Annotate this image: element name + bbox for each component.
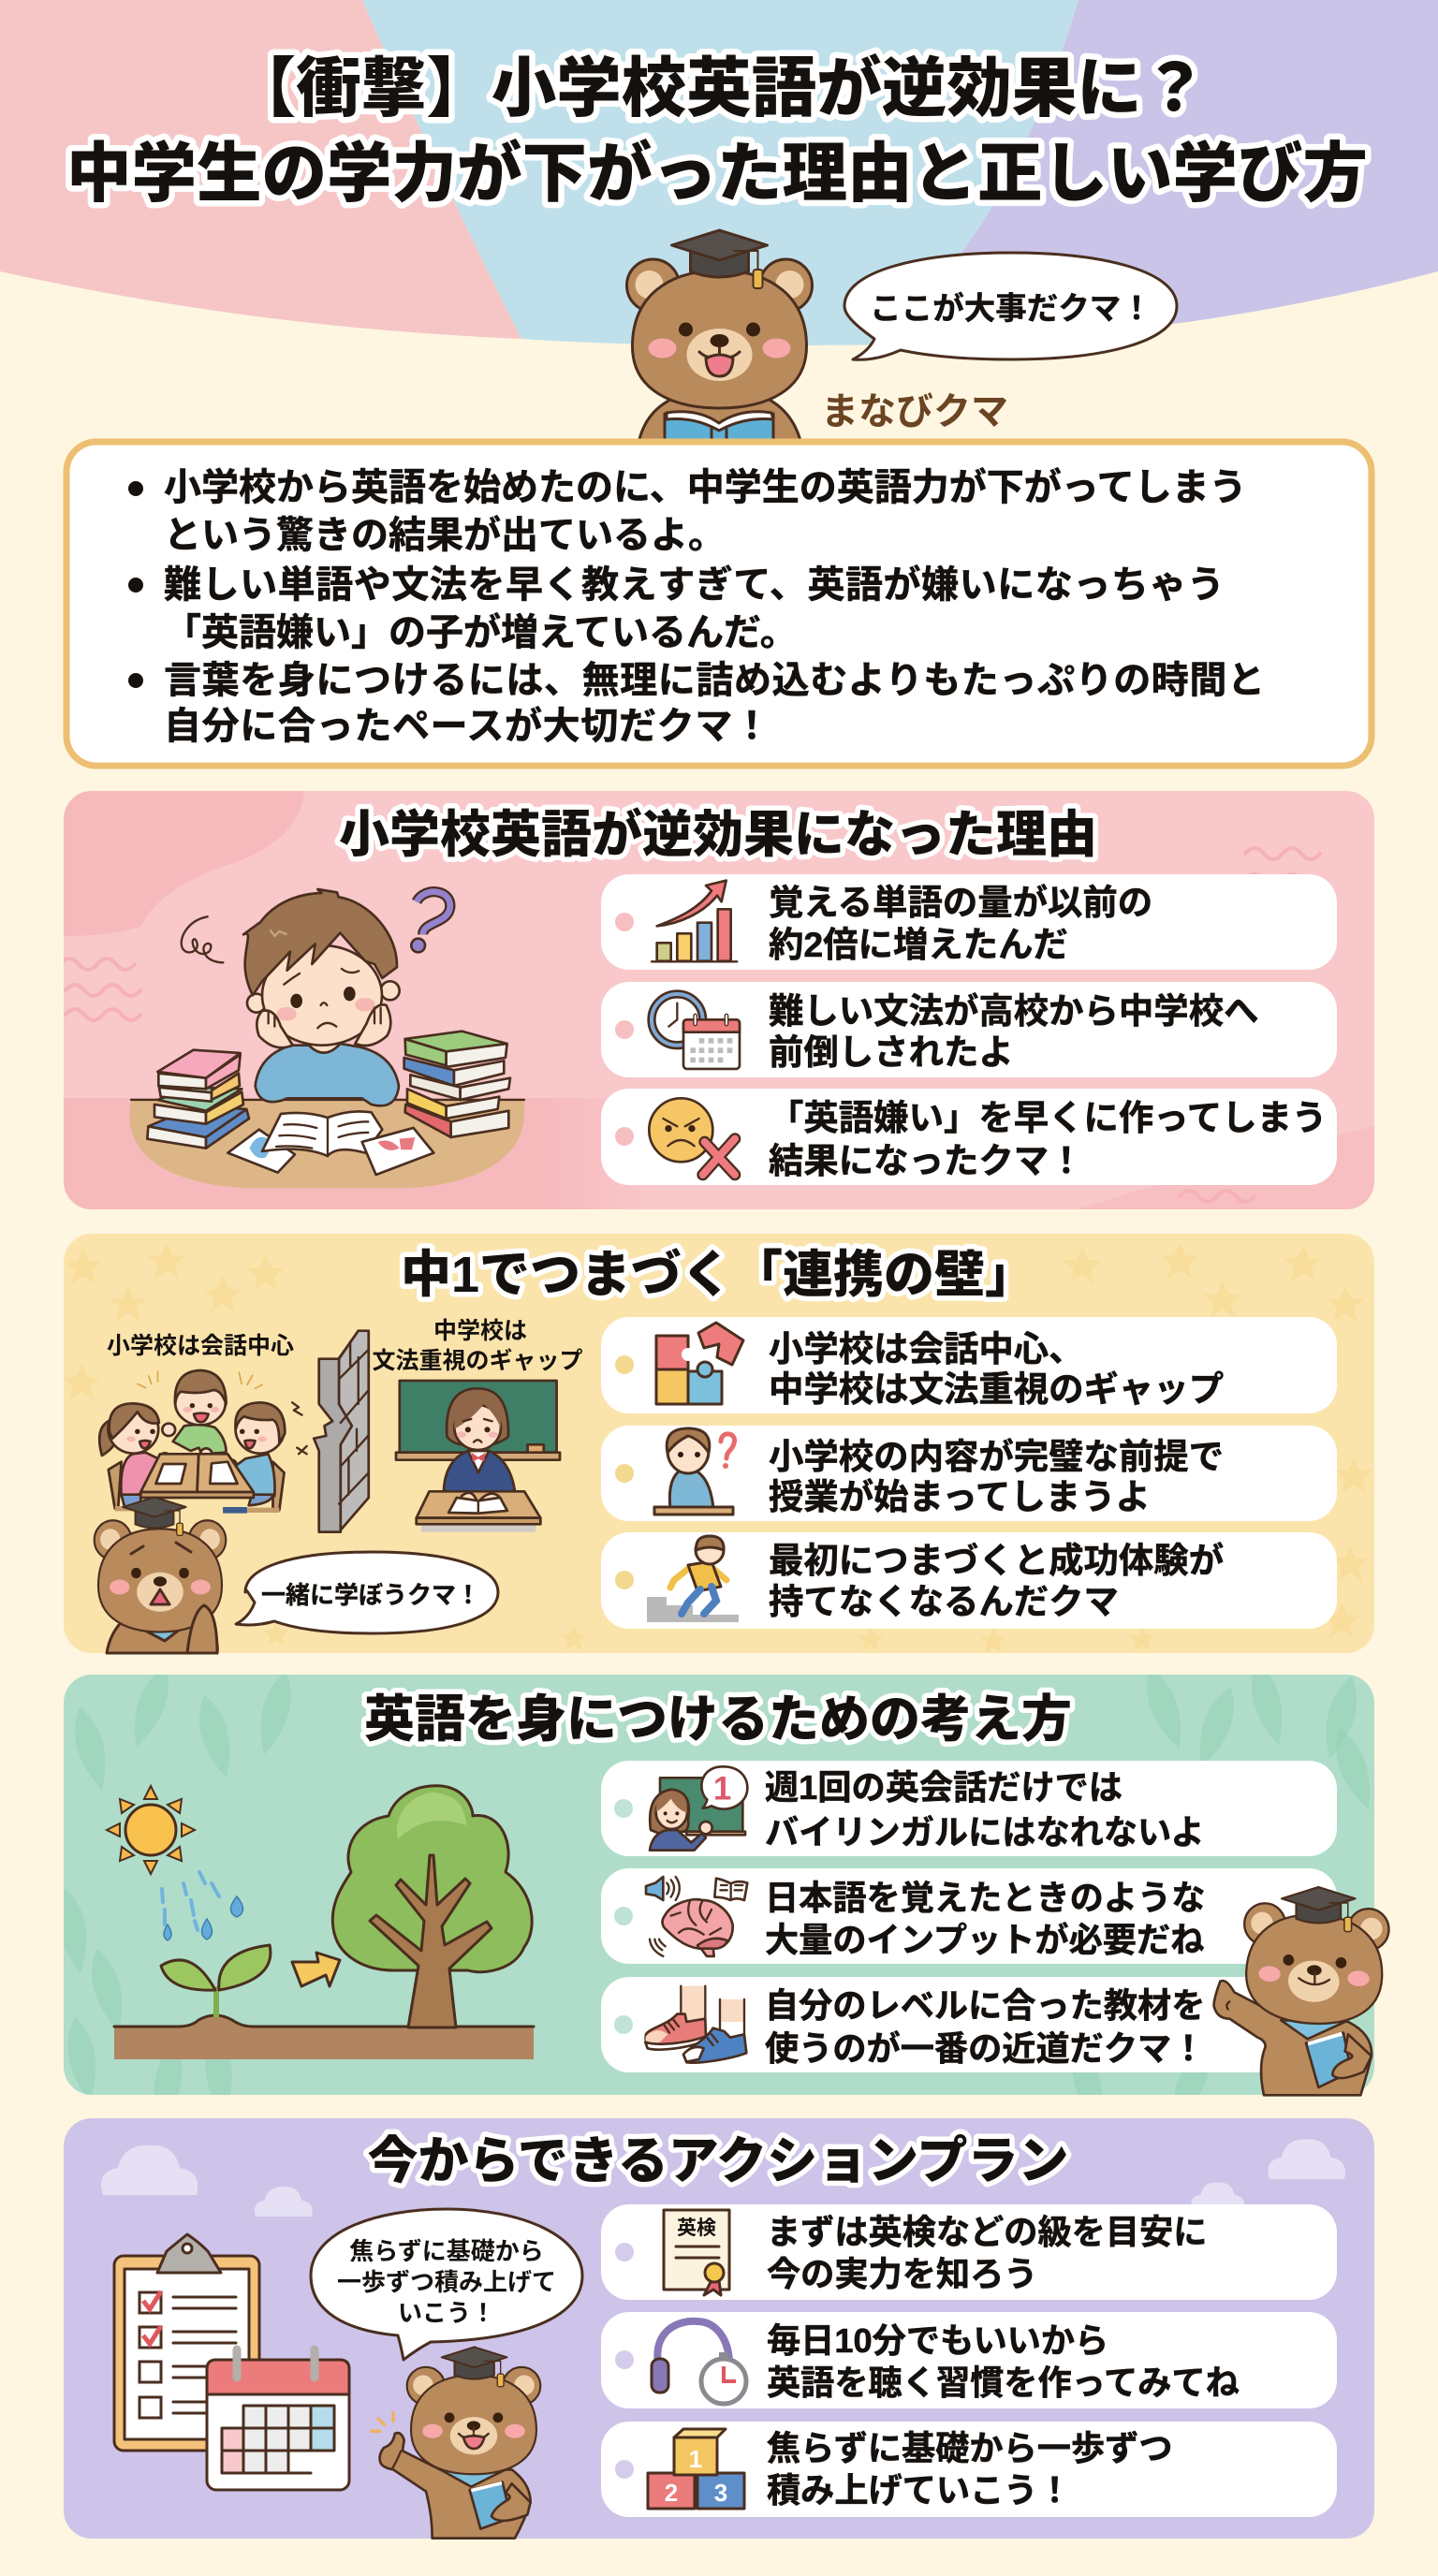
summary panel: 難しい単語や文法を早く教えすぎて、英語が嫌いになっちゃう xyxy=(164,564,1225,606)
icon: numbered blocks: 2 xyxy=(665,2479,678,2507)
icon: thinking boy xyxy=(654,1428,735,1515)
item row: Eiken: 今の実力を知ろう xyxy=(767,2255,1037,2293)
item row: stumbling xyxy=(601,1532,1337,1629)
item row: grammar moved earlier xyxy=(601,982,1337,1077)
heading: 中1でつまづく「連携の壁」 xyxy=(401,1247,1035,1303)
item row: grammar moved earlier: 難しい文法が高校から中学校へ xyxy=(769,991,1258,1031)
item row: huge input: 大量のインプットが必要だね xyxy=(765,1921,1204,1959)
illustration: sun and rain xyxy=(107,1786,243,1940)
item row: assumed knowledge: 授業が始まってしまうよ xyxy=(769,1477,1151,1516)
title: 中学生の学力が下がった理由と正しい学び方 xyxy=(66,137,1368,210)
item row: daily listening xyxy=(601,2312,1337,2408)
summary panel xyxy=(66,442,1372,766)
heading: 今からできるアクションプラン xyxy=(368,2133,1068,2189)
item row: right-level materials: 自分のレベルに合った教材を xyxy=(765,1986,1205,2025)
illustration: wall xyxy=(314,1331,369,1532)
label: elementary: 小学校は会話中心 xyxy=(107,1333,294,1359)
right stack xyxy=(405,1105,451,1137)
item row: assumed knowledge xyxy=(601,1426,1337,1521)
item row: conversation vs grammar: 小学校は会話中心、 xyxy=(769,1329,1084,1368)
speech bubble: ここが大事だクマ！: ここが大事だクマ！ xyxy=(870,291,1152,327)
item row: once a week: バイリンガルにはなれないよ xyxy=(765,1813,1205,1852)
item row: once a week: 週1回の英会話だけでは xyxy=(765,1768,1123,1807)
summary panel: 小学校から英語を始めたのに、中学生の英語力が下がってしまう xyxy=(164,467,1247,508)
summary panel: という驚きの結果が出ているよ。 xyxy=(164,515,726,556)
icon: angry face with cross xyxy=(649,1098,735,1175)
item row: vocabulary doubled: 覚える単語の量が以前の xyxy=(769,883,1152,922)
icon: Eiken certificate: 英検 xyxy=(677,2217,716,2239)
item row: right-level materials xyxy=(601,1977,1337,2072)
illustration: worried bear xyxy=(95,1497,226,1653)
item row: grammar moved earlier: 前倒しされたよ xyxy=(769,1032,1014,1072)
item row: assumed knowledge: 小学校の内容が完璧な前提で xyxy=(769,1437,1224,1476)
icon: Eiken certificate xyxy=(664,2210,729,2295)
icon: numbered blocks xyxy=(648,2429,744,2509)
illustration: ground and sprout xyxy=(114,1945,534,2059)
item row: daily listening: 毎日10分でもいいから xyxy=(767,2321,1108,2360)
panel: reasons xyxy=(60,791,1374,1209)
item row: dislike of English: 「英語嫌い」を早くに作ってしまう xyxy=(769,1098,1327,1137)
speech bubble: build step by step: いこう！ xyxy=(398,2299,495,2327)
icon: two shoes xyxy=(645,1986,746,2063)
summary panel: 言葉を身につけるには、無理に詰め込むよりもたっぷりの時間と xyxy=(164,660,1265,701)
icon: puzzle pieces xyxy=(656,1323,743,1404)
icon: numbered blocks: 1 xyxy=(689,2445,702,2473)
illustration: children talking xyxy=(99,1370,307,1514)
illustration: tree xyxy=(332,1786,532,2027)
speech bubble: study together xyxy=(236,1552,498,1633)
item row: dislike of English: 結果になったクマ！ xyxy=(769,1141,1084,1180)
item row: right-level materials: 使うのが一番の近道だクマ！ xyxy=(765,2029,1205,2068)
illustration: checklist clipboard xyxy=(114,2234,259,2451)
speech bubble: build step by step: 焦らずに基礎から xyxy=(349,2237,544,2265)
left stack xyxy=(147,1126,206,1149)
summary panel: 「英語嫌い」の子が増えているんだ。 xyxy=(164,612,798,653)
icon: numbered blocks: 3 xyxy=(714,2479,727,2507)
item row: vocabulary doubled: 約2倍に増えたんだ xyxy=(769,925,1068,964)
heading: 英語を身につけるための考え方 xyxy=(364,1691,1072,1748)
item row: basics one step at a time: 焦らずに基礎から一歩ずつ xyxy=(767,2429,1173,2467)
panel: how to think xyxy=(64,1675,1390,2097)
panel: action plan xyxy=(64,2118,1374,2539)
speech bubble: build step by step: 一歩ずつ積み上げて xyxy=(337,2268,556,2296)
speech bubble: ここが大事だクマ！ xyxy=(844,253,1177,359)
item row: once a week xyxy=(601,1761,1337,1856)
arrow xyxy=(292,1953,340,1986)
papers and book xyxy=(227,1130,295,1173)
title: 【衝撃】小学校英語が逆効果に？ xyxy=(231,51,1207,124)
panel: transition wall xyxy=(63,1234,1374,1653)
header colour bands xyxy=(0,0,1438,345)
label: junior high: 文法重視のギャップ xyxy=(372,1348,583,1374)
item row: Eiken xyxy=(601,2204,1337,2300)
title xyxy=(66,51,1368,210)
item row: huge input: 日本語を覚えたときのような xyxy=(765,1879,1205,1917)
item row: dislike of English xyxy=(601,1089,1337,1185)
item row: basics one step at a time: 積み上げていこう！ xyxy=(767,2471,1072,2510)
label: junior high: 中学校は xyxy=(433,1318,527,1344)
icon: running boy on stairs xyxy=(647,1536,739,1622)
speech bubble: build step by step xyxy=(311,2209,582,2360)
heading: 小学校英語が逆効果になった理由 xyxy=(339,806,1097,863)
illustration: calendar xyxy=(207,2349,349,2490)
illustration: thumbs-up bear xyxy=(372,2347,540,2539)
icon: teacher with board xyxy=(650,1766,747,1851)
mascot bear: まなびクマ xyxy=(627,230,813,449)
summary panel: 自分に合ったペースが大切だクマ！ xyxy=(164,706,770,747)
question mark xyxy=(417,892,450,934)
mascot name: まなびクマ xyxy=(821,391,1008,432)
icon: teacher with board: 1 xyxy=(713,1770,731,1807)
icon: rising bar chart xyxy=(652,881,737,961)
icon: headphones and stopwatch xyxy=(652,2321,746,2404)
label: junior high xyxy=(372,1318,583,1374)
item row: basics one step at a time xyxy=(601,2422,1337,2517)
illustration: pointing bear xyxy=(1214,1887,1390,2095)
item row: huge input xyxy=(601,1868,1337,1964)
illustration: boy studying at a desk xyxy=(129,889,524,1188)
icon: clock and calendar xyxy=(649,991,740,1069)
item row: conversation vs grammar xyxy=(601,1317,1337,1413)
item row: stumbling: 持てなくなるんだクマ xyxy=(769,1582,1119,1621)
illustration: classroom teacher xyxy=(396,1381,560,1532)
item row: vocabulary doubled xyxy=(601,874,1337,970)
item row: daily listening: 英語を聴く習慣を作ってみてね xyxy=(767,2364,1240,2402)
item row: conversation vs grammar: 中学校は文法重視のギャップ xyxy=(769,1369,1224,1409)
item row: stumbling: 最初につまづくと成功体験が xyxy=(769,1541,1224,1580)
icon: brain with sound and book xyxy=(646,1877,747,1956)
item row: Eiken: まずは英検などの級を目安に xyxy=(767,2213,1207,2251)
speech bubble: study together: 一緒に学ぼうクマ！ xyxy=(261,1581,480,1609)
